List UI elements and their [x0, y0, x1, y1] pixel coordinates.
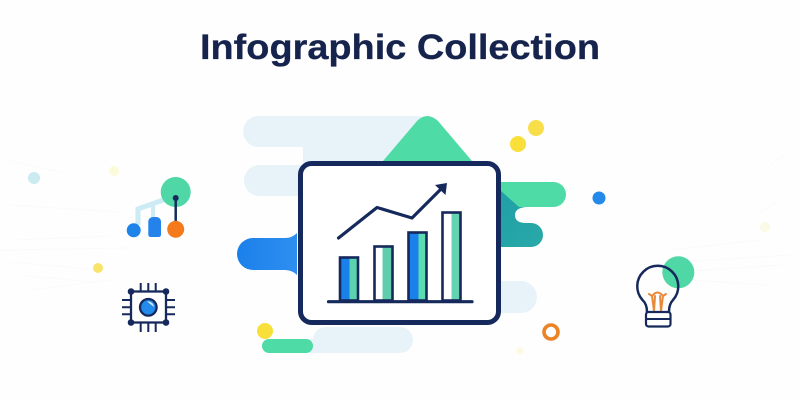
background shape: teal wedge and pill: [495, 191, 543, 247]
decorative ring: orange: [544, 325, 558, 339]
background shape: green mountain: [383, 116, 505, 200]
bar 2: [374, 246, 392, 300]
decorative dot: pale cyan left: [28, 172, 40, 184]
chart baseline: [328, 300, 472, 303]
background shape: green pill bottom: [262, 339, 313, 353]
decorative dot: pale yellow right: [760, 222, 770, 232]
bar 1: [340, 258, 358, 300]
title: Infographic Collection: [200, 28, 600, 67]
decorative dot: yellow bottom left: [257, 323, 273, 339]
icon: network nodes: [127, 177, 191, 238]
decorative dot: blue: [592, 192, 606, 204]
icon: light bulb: [637, 256, 694, 326]
background shape: blue pill left: [237, 233, 297, 275]
decorative dot: pale yellow bottom: [516, 347, 524, 355]
bar 3: [408, 232, 426, 300]
trend line with arrow: [338, 183, 447, 238]
decorative dot: yellow left: [93, 263, 103, 273]
icon: microchip: [122, 283, 175, 332]
background shape: green pill right: [495, 182, 566, 207]
decorative dot: yellow upper: [510, 136, 526, 152]
bar 4: [442, 212, 460, 300]
background shape: pale blue clouds: [243, 116, 537, 353]
panel: central chart frame: [300, 164, 498, 322]
decorative dot: pale yellow left: [109, 166, 119, 176]
decorative dot: yellow top: [528, 120, 544, 136]
